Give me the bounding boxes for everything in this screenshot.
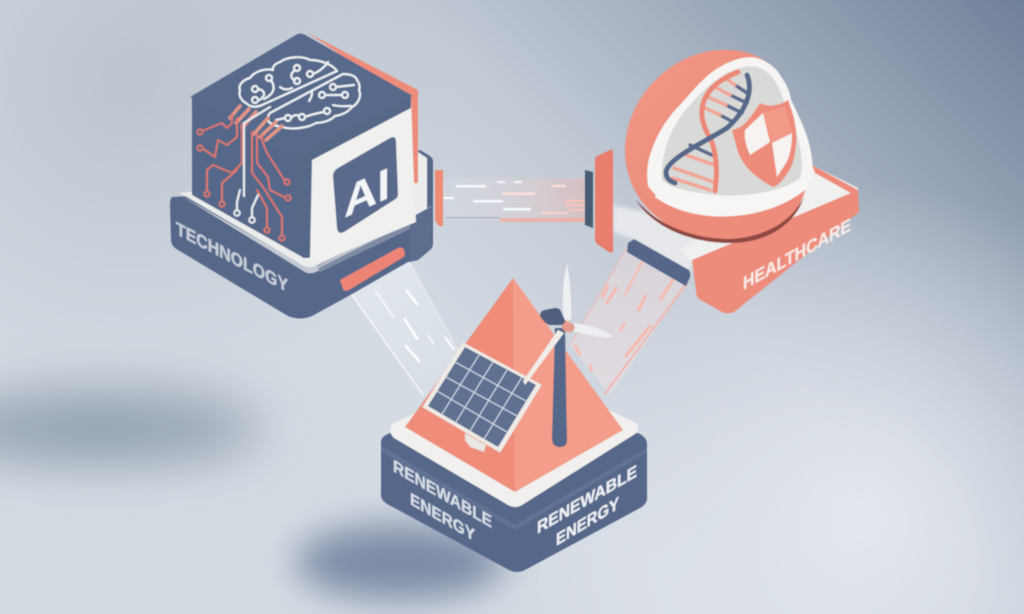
beam: healthcare to renewable energy [570, 246, 687, 395]
shield [732, 100, 796, 187]
cube top face [192, 34, 411, 158]
AI badge: AI [344, 157, 390, 228]
healthcare label: HEALTHCARE [743, 215, 851, 295]
renewable label left: RENEWABLE [393, 455, 492, 532]
technology label: TECHNOLOGY [176, 219, 288, 297]
module: renewable energy [381, 263, 647, 572]
technology base [170, 150, 433, 318]
pyramid right face [513, 278, 623, 492]
pyramid left face [405, 278, 515, 492]
orange back panel [308, 33, 418, 183]
circuit traces [197, 106, 291, 241]
sphere opening [647, 57, 813, 213]
beam: technology to healthcare [443, 178, 586, 222]
orange connector bottom [340, 247, 405, 291]
blue bottom connector [627, 239, 690, 286]
background shadows [0, 394, 505, 600]
blue side tab [585, 170, 593, 228]
sphere interior [662, 66, 802, 196]
renewable base [381, 380, 647, 572]
turbine blade upper [563, 263, 571, 322]
turbine blade lower [523, 330, 564, 385]
solar panel [423, 343, 541, 452]
module: technology [170, 33, 443, 318]
brain icon [239, 57, 360, 128]
cube right face [293, 97, 416, 262]
turbine tower [552, 328, 567, 447]
beam: technology to renewable energy [347, 254, 459, 396]
white plinth [390, 365, 638, 507]
turbine hub [562, 318, 575, 332]
solar panel support [465, 433, 486, 452]
sphere shadow rim [636, 197, 804, 243]
turbine nacelle [540, 308, 565, 325]
module: healthcare [585, 50, 859, 313]
sphere outer shell [625, 50, 806, 241]
healthcare base [613, 165, 859, 313]
renewable label left: ENERGY [410, 488, 475, 545]
renewable label right: ENERGY [556, 492, 620, 550]
sphere lip [655, 176, 810, 218]
DNA helix [666, 72, 749, 191]
cube left face [192, 97, 304, 258]
orange tab right [435, 170, 443, 226]
orange side tab [595, 150, 613, 253]
turbine blade right [573, 323, 613, 337]
AI badge [333, 137, 398, 233]
renewable label right: RENEWABLE [537, 461, 637, 538]
